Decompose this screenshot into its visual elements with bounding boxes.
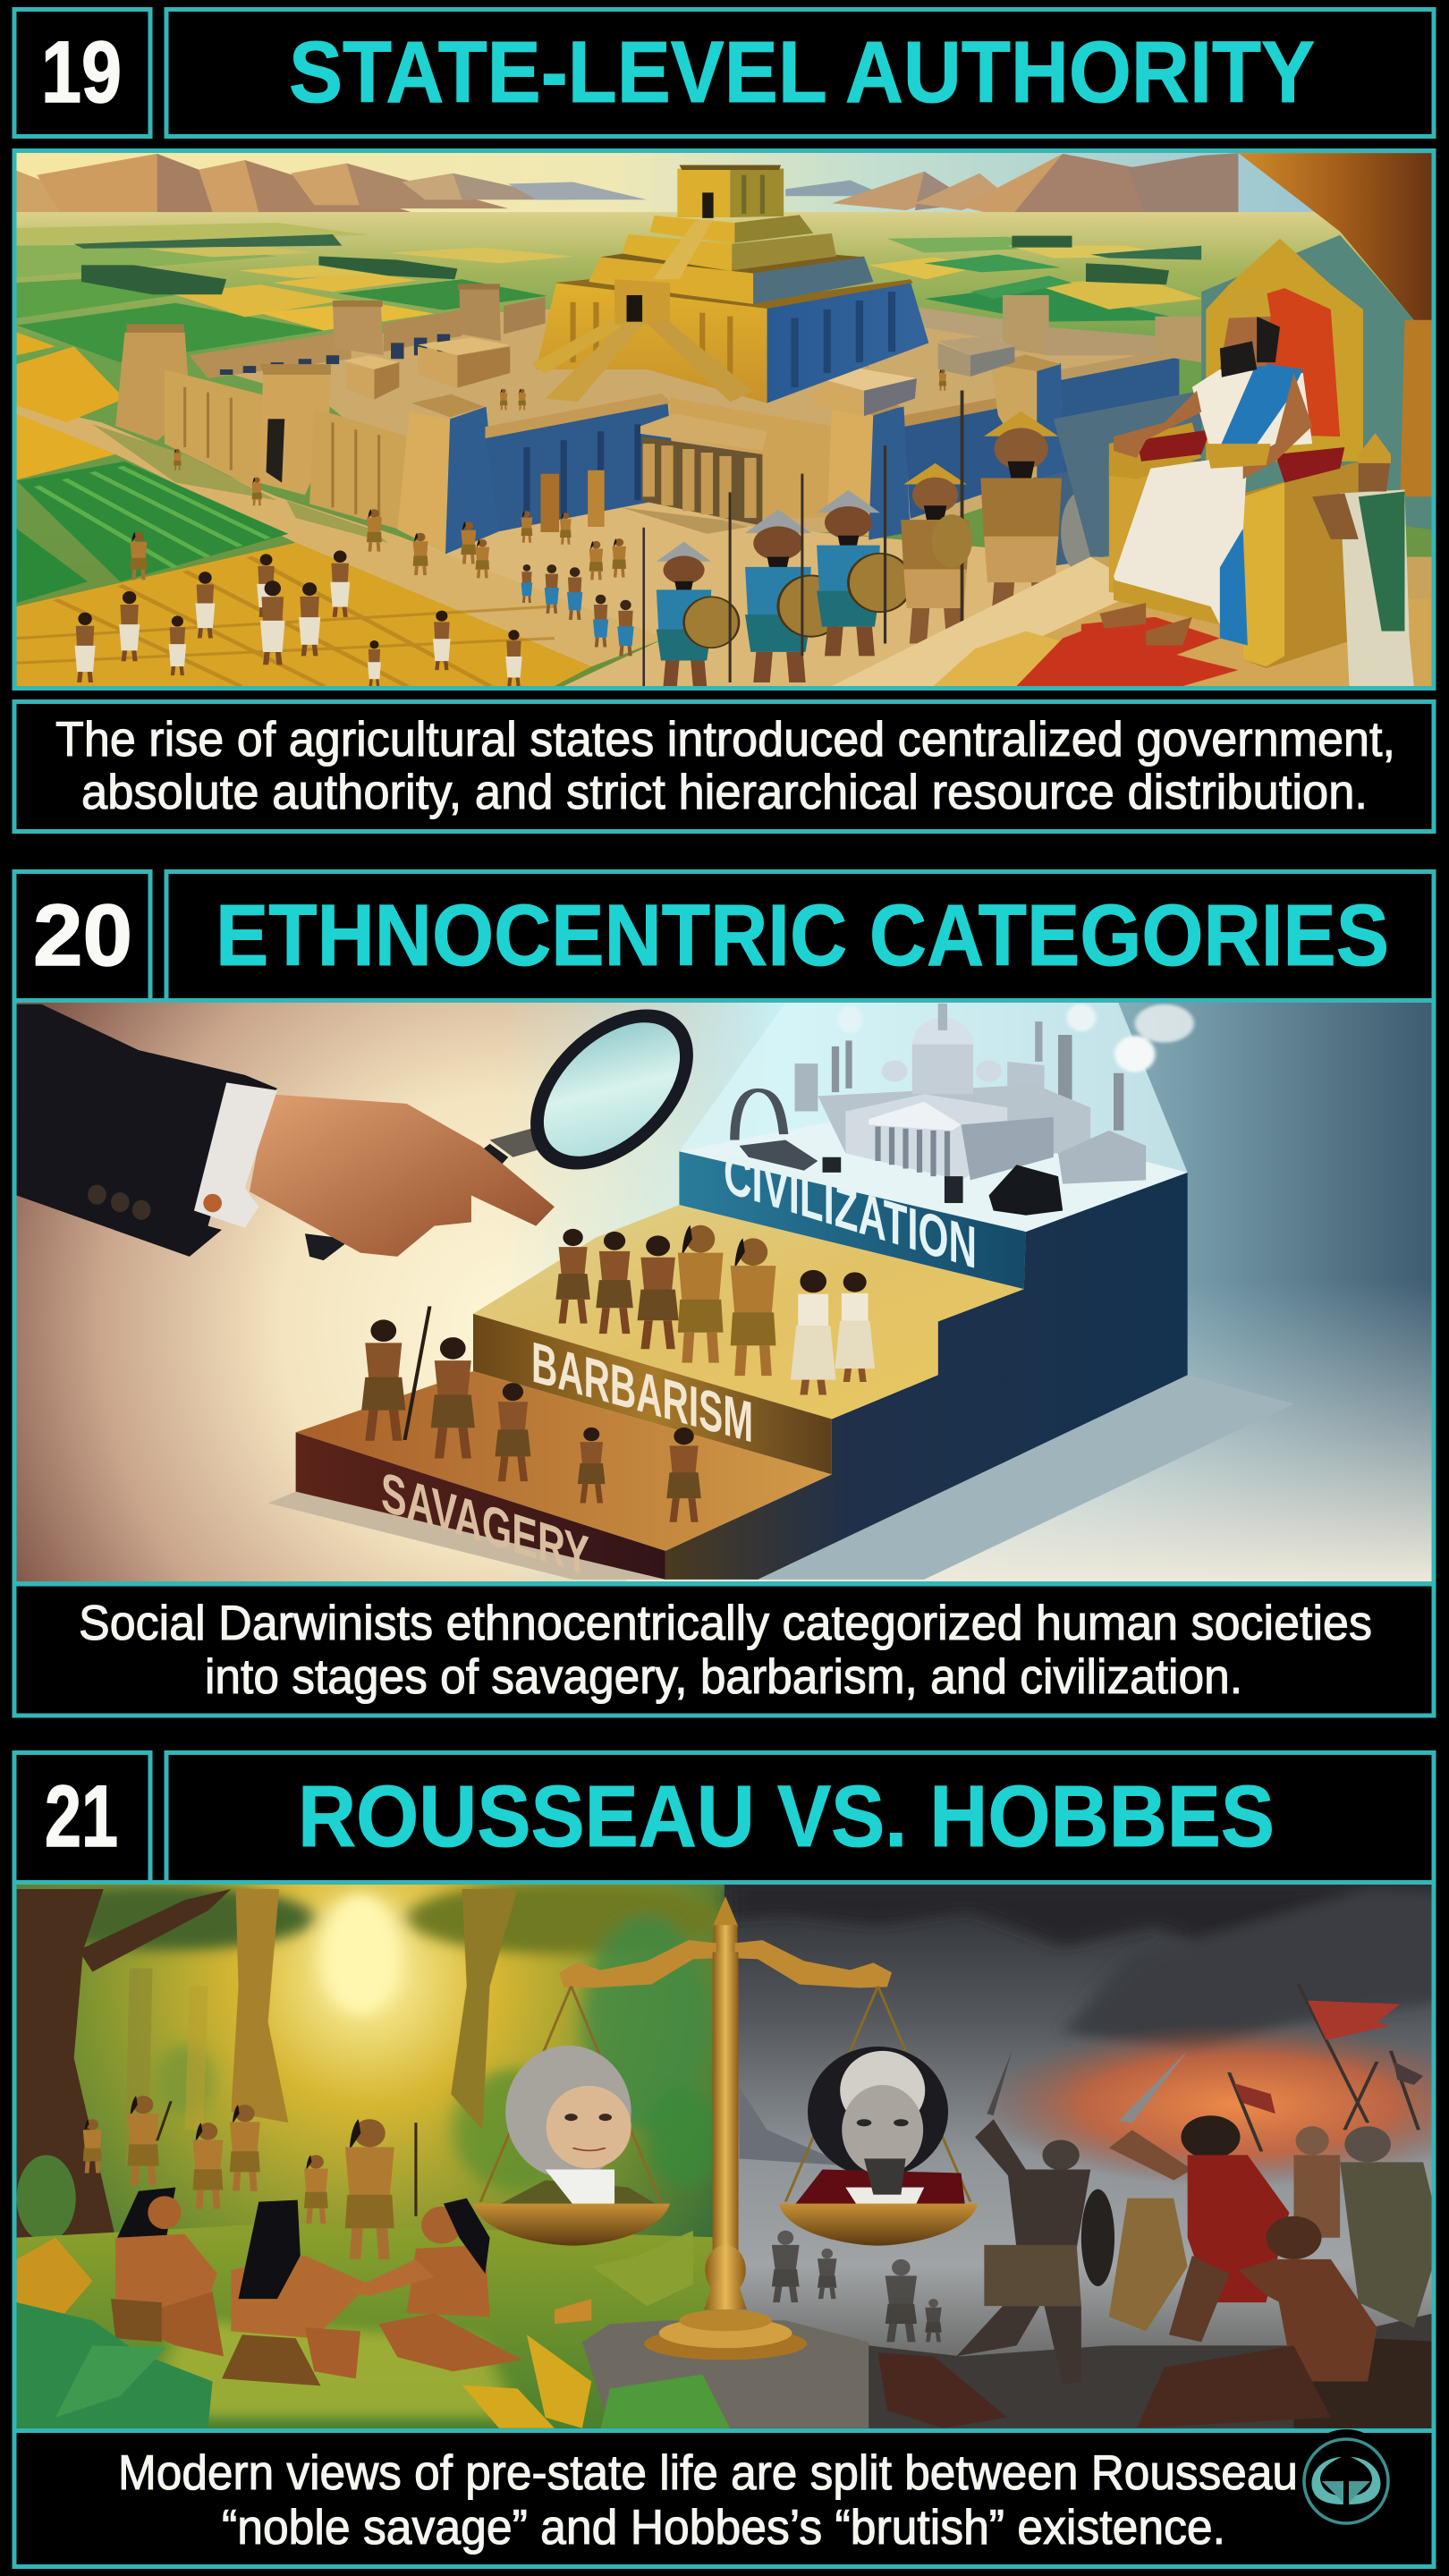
heading: rousseau vs. hobbes: ROUSSEAU VS. HOBBES [298, 1767, 1275, 1865]
heading: state-level authority: STATE-LEVEL AUTHORITY [289, 23, 1315, 121]
magnifying glass lens [500, 979, 724, 1200]
heading: state-level authority [166, 9, 1434, 136]
dais steps [832, 557, 1449, 686]
curtain and background behind throne [1054, 153, 1449, 557]
label: barbarism: BARBARISM [531, 1329, 753, 1455]
king [1100, 288, 1312, 645]
floor shadow [758, 1375, 1293, 1580]
forest trunks and canopy [17, 1882, 721, 2241]
caption 19: The rise of agricultural states introduced centralized government, [55, 711, 1395, 767]
field workers [75, 532, 522, 686]
plaza [203, 309, 1178, 539]
ziggurat [531, 165, 928, 403]
logo [1300, 2429, 1393, 2526]
section 21: rousseau vs. hobbes [14, 1753, 1449, 2567]
image frame [14, 1882, 1434, 2431]
fields [17, 223, 1203, 362]
plaza buildings [343, 335, 1014, 416]
balance scale [559, 1896, 892, 2360]
magnifier handle [305, 1129, 559, 1260]
section 20: ethnocentric categories [14, 871, 1434, 1716]
caption 19 [14, 701, 1434, 832]
background villagers [83, 2096, 416, 2259]
illustration: stepped stages with hand and magnifying glass [16, 979, 1432, 1588]
illustration: agricultural state with ziggurat, king and soldiers [0, 143, 1449, 688]
spears and flags [1229, 1985, 1423, 2151]
figures on barbarism step [555, 1225, 875, 1395]
throne [1081, 239, 1363, 668]
foreground warriors [1137, 2126, 1442, 2428]
caption 21 [14, 2431, 1434, 2567]
warrior in red cloak [1109, 2051, 1289, 2342]
illustration: scales between forest peace and storm war [16, 1882, 1449, 2429]
mountains [16, 153, 1238, 213]
label: savagery: SAVAGERY [381, 1460, 589, 1588]
battle ground and rubble [869, 2309, 1449, 2428]
stairs [296, 1104, 1188, 1580]
rock [582, 2320, 892, 2428]
foliage [17, 2231, 693, 2428]
distant battling silhouettes [772, 2231, 942, 2342]
courtyard people [174, 369, 946, 656]
number badge 21 [14, 1753, 150, 1882]
heading: rousseau vs. hobbes [166, 1753, 1434, 1882]
caption 19: absolute authority, and strict hierarchical resource distribution. [81, 764, 1368, 819]
suit sleeve [17, 1004, 277, 1257]
foreground plant [601, 2374, 730, 2428]
caption 21: “noble savage” and Hobbes’s “brutish” existence. [222, 2499, 1225, 2555]
image frame [14, 1000, 1434, 1583]
light beam [679, 1003, 1188, 1173]
lower-left farm plots and road [17, 333, 665, 686]
caption 20: into stages of savagery, barbarism, and civilization. [205, 1648, 1242, 1704]
section 19: state-level authority [0, 9, 1449, 832]
storm clouds and fire [730, 1885, 1449, 2188]
city of civilization [734, 1004, 1194, 1216]
number badge 20 [14, 871, 150, 1000]
seated figures [111, 2188, 522, 2385]
number badge 19: 19 [41, 23, 122, 121]
figures on savagery step [361, 1306, 701, 1522]
soldiers [642, 390, 1102, 686]
number badge 21: 21 [45, 1767, 118, 1865]
hand [194, 1082, 555, 1257]
caption 20: Social Darwinists ethnocentrically categorized human societies [79, 1595, 1372, 1650]
caption 21: Modern views of pre-state life are split between Rousseau [118, 2445, 1298, 2500]
caption 20 [14, 1584, 1434, 1716]
attendant [1312, 433, 1414, 686]
number badge 19 [14, 9, 150, 136]
image frame [14, 150, 1434, 689]
tree clusters [74, 234, 1201, 294]
portrait: rousseau on left pan [473, 1987, 970, 2246]
label: civilization: CIVILIZATION [724, 1139, 977, 1282]
fortress walls and towers [115, 284, 1201, 554]
portrait: hobbes on right pan [779, 2046, 978, 2246]
warrior with shield [956, 2051, 1114, 2385]
temple entrance [540, 413, 767, 534]
meadow [17, 2224, 730, 2428]
number badge 20: 20 [33, 886, 132, 984]
